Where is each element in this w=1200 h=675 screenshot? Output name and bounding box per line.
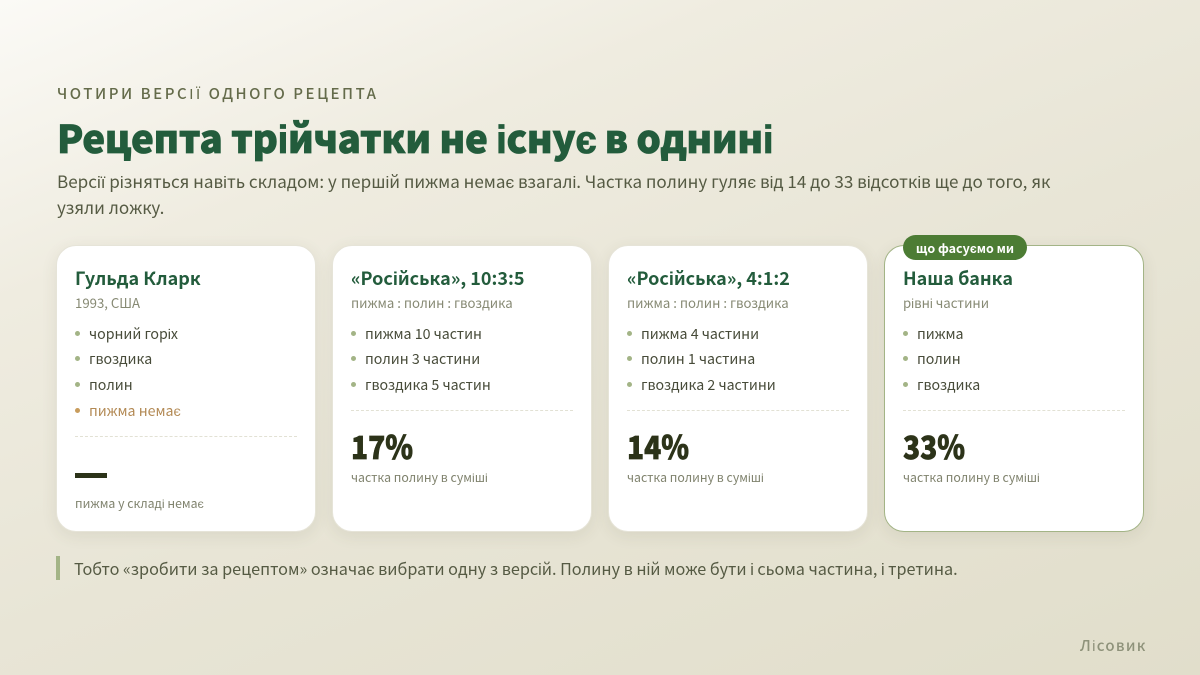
caption: частка полину в суміші — [351, 468, 488, 486]
caption: пижма у складі немає — [75, 494, 204, 512]
callout — [56, 556, 960, 580]
percentage: 14% — [627, 423, 689, 469]
percentage: 33% — [903, 423, 965, 469]
caption: частка полину в суміші — [903, 468, 1040, 486]
badge — [903, 235, 1027, 260]
panel: Російська 10:3:5: гвоздика 5 частин — [365, 375, 491, 395]
intro text: Версії різняться навіть складом: у першій пижма немає взагалі. Частка полину гуляє від 14 до 33 відсотків ще до того, як — [57, 168, 1050, 193]
card heading: «Російська», 10:3:5 — [351, 265, 524, 291]
intro text: узяли ложку. — [57, 194, 164, 218]
panel: Гульда Кларк: чорний горіх — [89, 324, 178, 344]
no tansy dash — [75, 473, 107, 478]
caption: частка полину в суміші — [627, 468, 764, 486]
panel: Наша банка: полин — [917, 349, 961, 369]
brand: Лісовик — [1080, 635, 1147, 656]
callout text: Тобто «зробити за рецептом» означає вибрати одну з версій. Полину в ній може бути і сьома частина, і третина. — [74, 556, 958, 580]
panel: Гульда Кларк: гвоздика — [89, 349, 152, 369]
card heading: «Російська», 4:1:2 — [627, 265, 790, 291]
title: Рецепта трійчатки не існує в однині — [57, 109, 773, 165]
panel: Гульда Кларк: пижма немає — [89, 401, 181, 421]
panel: Гульда Кларк: полин — [89, 375, 133, 395]
card subheading: 1993, США — [75, 293, 140, 312]
ingredient list — [903, 324, 980, 395]
panel: Російська 4:1:2: пижма 4 частини — [641, 324, 759, 344]
panel: Російська 4:1:2 — [608, 245, 868, 532]
percentage: 17% — [351, 423, 413, 469]
panel: Наша банка — [884, 245, 1144, 532]
panel: Російська 4:1:2: гвоздика 2 частини — [641, 375, 776, 395]
card subheading: пижма : полин : гвоздика — [351, 293, 513, 312]
intro text — [57, 168, 1050, 218]
card heading: Наша банка — [903, 265, 1013, 291]
panel: Російська 10:3:5 — [332, 245, 592, 532]
eyebrow: ЧОТИРИ ВЕРСІЇ ОДНОГО РЕЦЕПТА — [57, 83, 378, 104]
panel: Наша банка: пижма — [917, 324, 964, 344]
ingredient list — [351, 324, 491, 395]
ingredient list — [75, 324, 181, 421]
card heading: Гульда Кларк — [75, 265, 201, 291]
panel: Російська 10:3:5: полин 3 частини — [365, 349, 480, 369]
panel: Російська 4:1:2: полин 1 частина — [641, 349, 755, 369]
panel: Наша банка: гвоздика — [917, 375, 980, 395]
ingredient list — [627, 324, 776, 395]
card subheading: пижма : полин : гвоздика — [627, 293, 789, 312]
panel: Гульда Кларк — [56, 245, 316, 532]
panel: Російська 10:3:5: пижма 10 частин — [365, 324, 482, 344]
badge: що фасуємо ми — [916, 238, 1014, 257]
card subheading: рівні частини — [903, 293, 989, 312]
